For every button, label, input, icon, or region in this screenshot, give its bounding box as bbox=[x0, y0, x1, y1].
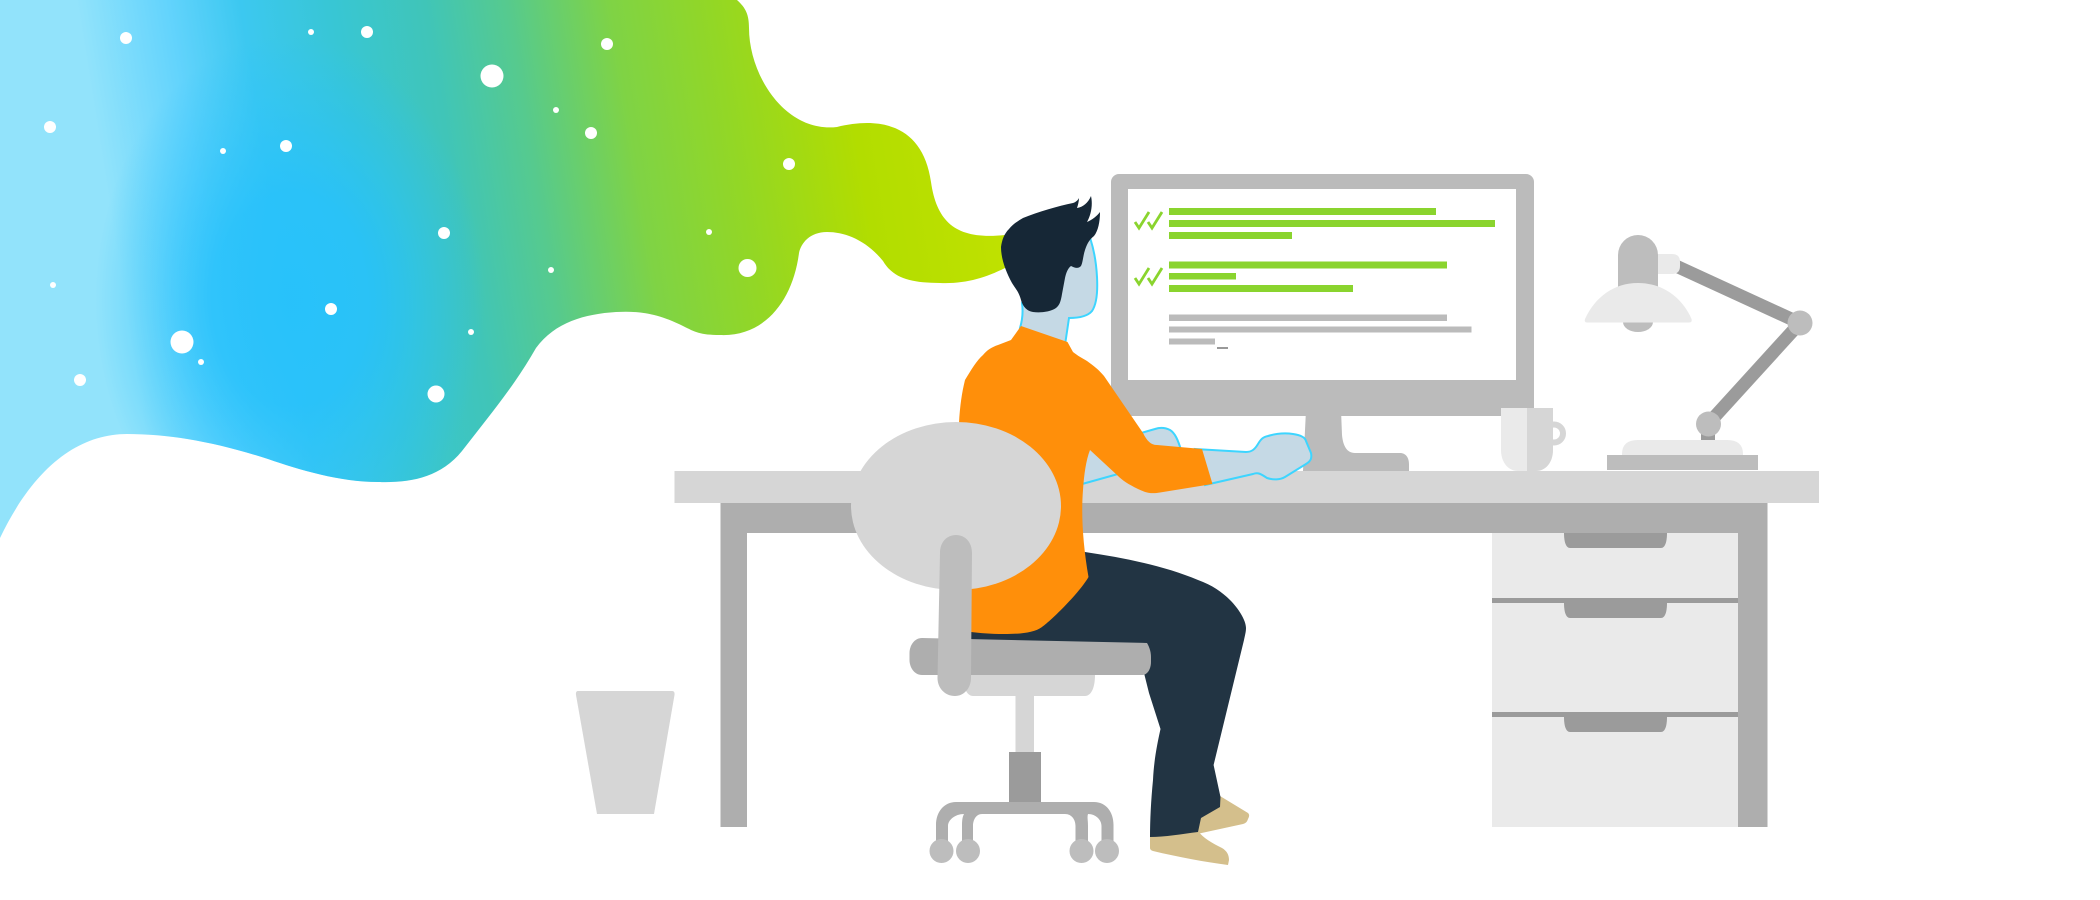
trousers bbox=[971, 552, 1246, 837]
office chair bbox=[851, 422, 1151, 863]
lamp shade bbox=[1585, 283, 1692, 322]
desk frame bbox=[720, 502, 1768, 827]
shoes bbox=[1150, 796, 1249, 865]
desk top bbox=[674, 471, 1819, 503]
person at desk bbox=[940, 196, 1311, 865]
mug bbox=[1501, 408, 1563, 471]
screen bbox=[1128, 189, 1516, 380]
neck and face bbox=[1020, 225, 1097, 345]
desk bbox=[674, 471, 1819, 827]
lamp bulb bbox=[1623, 320, 1653, 332]
drawer handles bbox=[1564, 533, 1667, 732]
lamp joints bbox=[1696, 310, 1812, 436]
drawers bbox=[1492, 533, 1738, 827]
orange shirt bbox=[940, 326, 1212, 634]
hair bbox=[1001, 196, 1100, 312]
green text lines bbox=[1169, 208, 1495, 292]
monitor stand bbox=[1303, 410, 1409, 471]
lamp arms bbox=[1676, 266, 1800, 424]
monitor body bbox=[1111, 174, 1534, 416]
desk lamp bbox=[1585, 235, 1812, 470]
chair post bbox=[1016, 696, 1034, 753]
chair back bbox=[851, 422, 1061, 590]
chair seat bbox=[910, 638, 1151, 675]
far arm bbox=[1075, 428, 1185, 486]
lamp head bbox=[1618, 235, 1658, 290]
stream shape bbox=[0, 0, 1005, 538]
lamp base bbox=[1622, 440, 1743, 456]
near arm and hand bbox=[1195, 433, 1311, 485]
wastebasket bbox=[576, 691, 675, 814]
monitor bbox=[1111, 174, 1534, 471]
grey text lines bbox=[1169, 314, 1472, 349]
chair armrest bbox=[938, 535, 972, 696]
lamp connector bbox=[1656, 254, 1680, 274]
gradient thought stream with stars bbox=[0, 0, 1005, 538]
lamp stem bbox=[1701, 432, 1715, 442]
chair legs bbox=[936, 802, 1114, 845]
green check marks bbox=[1135, 212, 1162, 284]
chair base bracket bbox=[963, 675, 1095, 696]
stars bbox=[44, 26, 795, 402]
chair wheels bbox=[930, 839, 1119, 863]
